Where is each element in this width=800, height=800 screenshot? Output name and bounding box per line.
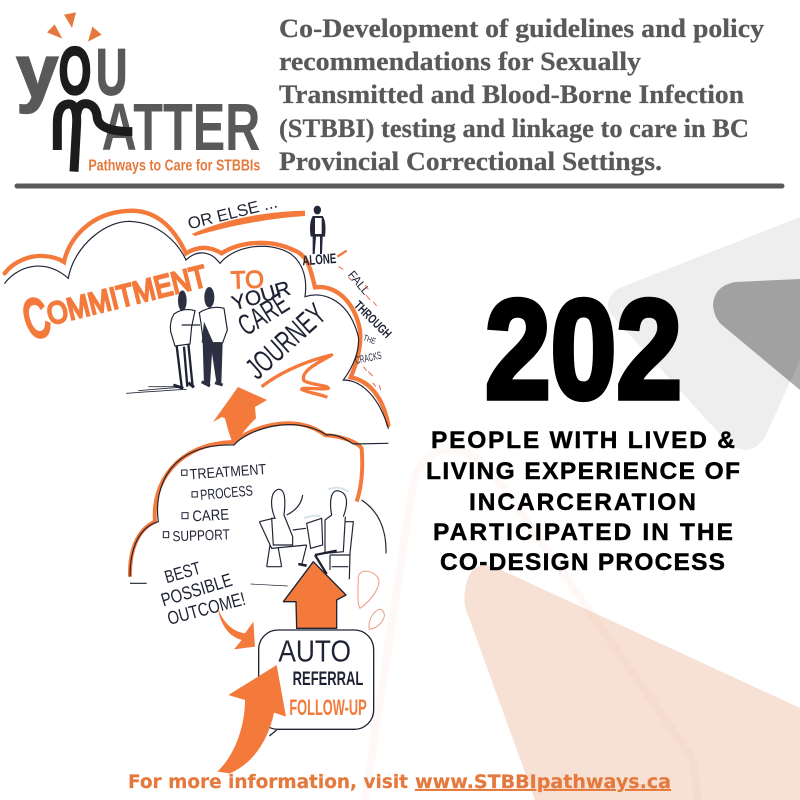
icon: two people seated in conversation [259, 488, 353, 579]
hand lettering: your care journey: CARE [232, 286, 295, 343]
hand lettering: fall through the cracks: FALL [345, 268, 373, 298]
checklist: TREATMENT [189, 462, 267, 483]
hand lettering: fall through the cracks: THE [362, 332, 377, 346]
logo tagline: Pathways to Care for STBBIs [88, 157, 260, 174]
heading: project title: recommendations for Sexually [279, 46, 641, 76]
cloud outline: middle [130, 423, 388, 583]
hand lettering: commitment to: C [15, 285, 57, 351]
arrow: to auto referral box [218, 607, 255, 649]
heading: project title: Transmitted and Blood-Borne Infection [279, 79, 744, 109]
hand lettering: best possible outcome [158, 558, 248, 629]
hand lettering: fall through the cracks: CRACKS [354, 350, 383, 367]
logo word: you: O [59, 35, 91, 109]
footer: more information link [128, 771, 671, 793]
hand lettering: your care journey: YOUR [229, 277, 293, 315]
brush stroke under or else [192, 211, 305, 236]
squiggle underline [262, 355, 332, 397]
checklist: CARE [192, 506, 229, 525]
footer: more information link: www.STBBIpathways.ca [415, 771, 671, 793]
cloud outline: top [5, 211, 388, 428]
text block: statistic caption: LIVING EXPERIENCE OF [426, 458, 740, 485]
hand lettering: or else: OR ELSE ... [186, 193, 279, 233]
hand lettering: best possible outcome: BEST [162, 558, 203, 587]
right person [199, 287, 227, 386]
panel: commitment to your care journey sketch [5, 193, 394, 428]
arrow: large orange upward arrow [217, 665, 286, 773]
hand lettering: fall through the cracks: THROUGH [351, 298, 394, 341]
icon: person alone [310, 206, 325, 254]
icon: two people walking together [126, 287, 227, 393]
left person [170, 290, 200, 388]
icon: orange burst triangles [47, 12, 102, 42]
heading: project title: Co-Development of guidelines and policy [279, 13, 764, 43]
text block: statistic caption: INCARCERATION [469, 489, 696, 516]
background shape: light gray triangle [608, 217, 800, 450]
hand lettering: commitment to: TO [230, 267, 265, 295]
background shape: peach triangle [464, 565, 800, 800]
box text: auto referral follow-up: REFERRAL [293, 669, 363, 690]
hand lettering: commitment to [15, 259, 265, 351]
text block: statistic caption: PARTICIPATED IN THE [433, 519, 733, 546]
checklist: SUPPORT [172, 527, 230, 545]
hand lettering: alone: ALONE [302, 250, 337, 268]
arrow: up from auto referral box [283, 562, 346, 628]
heading: project title: (STBBI) testing and linkage to care in BC [279, 113, 749, 143]
heading: project title [279, 13, 764, 176]
hand lettering: best possible outcome: OUTCOME! [165, 588, 248, 629]
icon: figure forming the letter M [57, 104, 132, 172]
hand lettering: your care journey [229, 277, 333, 386]
hand lettering: your care journey: JOURNEY [239, 297, 333, 386]
hand lettering: fall through the cracks [345, 268, 394, 367]
box text: auto referral follow-up: FOLLOW-UP [289, 695, 367, 720]
referral box [259, 630, 374, 729]
heading: project title: Provincial Correctional Settings. [279, 146, 662, 176]
logo word: atter: ATTER [102, 91, 260, 165]
ground shadow [126, 387, 187, 393]
text block: statistic caption [426, 427, 740, 576]
red dashes: the cracks [338, 267, 383, 402]
logo word: you: y [17, 29, 58, 113]
logo word: you: U [96, 36, 127, 109]
logo: You Matter [17, 12, 260, 174]
footer: more information link: For more information, visit [128, 771, 408, 793]
checklist [163, 462, 267, 545]
hand lettering: best possible outcome: POSSIBLE [158, 569, 235, 610]
box text: auto referral follow-up [278, 635, 367, 720]
logo word: you [17, 29, 127, 113]
box text: auto referral follow-up: AUTO [278, 635, 351, 669]
decorative petals [358, 571, 384, 629]
background shape: pale outlined triangle [365, 450, 697, 800]
text block: statistic caption: PEOPLE WITH LIVED & [431, 427, 735, 454]
statistic: 202: 202 [485, 270, 682, 428]
arrow: up to commitment [213, 387, 267, 445]
text block: statistic caption: CO-DESIGN PROCESS [440, 549, 725, 576]
background shape: dark gray triangle [713, 279, 800, 390]
checklist: PROCESS [200, 483, 254, 504]
panel: care steps and referral sketch [130, 387, 388, 773]
hand lettering: commitment to: OMMITMENT [43, 259, 210, 332]
